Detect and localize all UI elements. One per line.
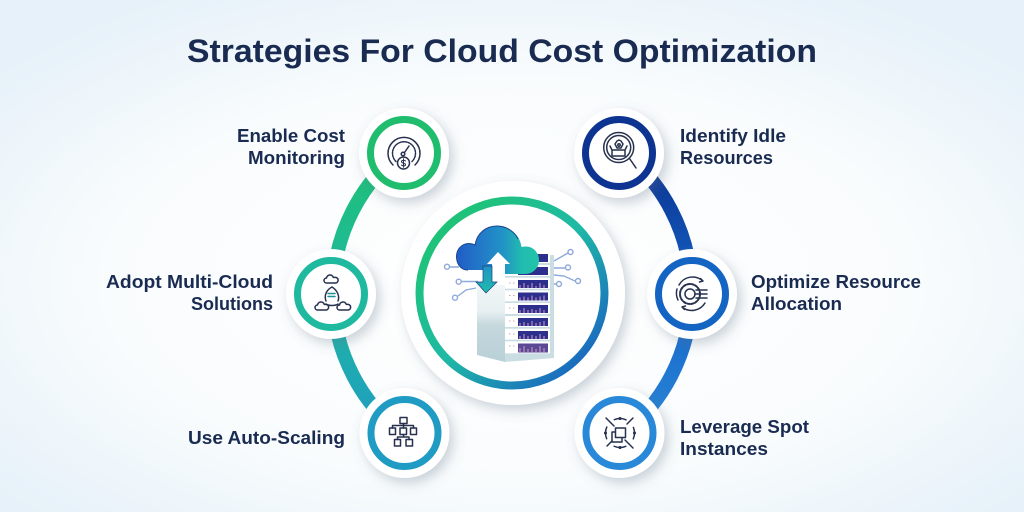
- node: Adopt Multi-Cloud Solutions: [286, 249, 376, 339]
- circuit lines: [444, 250, 580, 300]
- icon: magnifier over resource box: [604, 132, 636, 168]
- icon: gauge with dollar coin: [388, 137, 420, 169]
- arrow: upload: [487, 252, 510, 285]
- node: Use Auto-Scaling: [360, 388, 450, 478]
- label: Leverage Spot Instances: Instances: [680, 439, 768, 459]
- icon: three connected clouds: [315, 275, 351, 310]
- node: Identify Idle Resources: [574, 108, 664, 198]
- label: Optimize Resource Allocation: [751, 272, 921, 314]
- arrow: download: [476, 266, 497, 293]
- right outer arc: [622, 151, 691, 435]
- label: Identify Idle Resources: Identify Idle: [680, 126, 786, 146]
- icon: gear with cycle arrows: [676, 277, 707, 310]
- cloud: [456, 226, 539, 274]
- label: Optimize Resource Allocation: Allocation: [751, 294, 842, 314]
- label: Leverage Spot Instances: [680, 417, 809, 459]
- label: Enable Cost Monitoring: [237, 126, 345, 168]
- label: Use Auto-Scaling: Use Auto-Scaling: [188, 428, 345, 448]
- node: Leverage Spot Instances: [574, 388, 664, 478]
- icon: overlapping instances with arrows: [605, 418, 635, 448]
- label: Enable Cost Monitoring: Monitoring: [248, 148, 345, 168]
- label: Optimize Resource Allocation: Optimize Resource: [751, 272, 921, 292]
- node: Enable Cost Monitoring: [359, 108, 449, 198]
- label: Adopt Multi-Cloud Solutions: Adopt Multi-Cloud: [106, 272, 273, 292]
- title: Strategies For Cloud Cost Optimization: [187, 33, 817, 69]
- label: Identify Idle Resources: Resources: [680, 148, 773, 168]
- icon: hierarchy chart: [390, 418, 416, 446]
- server rack: [477, 252, 554, 362]
- label: Adopt Multi-Cloud Solutions: [106, 272, 273, 314]
- central hub: [401, 181, 625, 405]
- node: Optimize Resource Allocation: [647, 249, 737, 339]
- label: Leverage Spot Instances: Leverage Spot: [680, 417, 809, 437]
- label: Adopt Multi-Cloud Solutions: Solutions: [191, 294, 273, 314]
- left outer arc: [333, 151, 403, 435]
- label: Identify Idle Resources: [680, 126, 786, 168]
- label: Enable Cost Monitoring: Enable Cost: [237, 126, 345, 146]
